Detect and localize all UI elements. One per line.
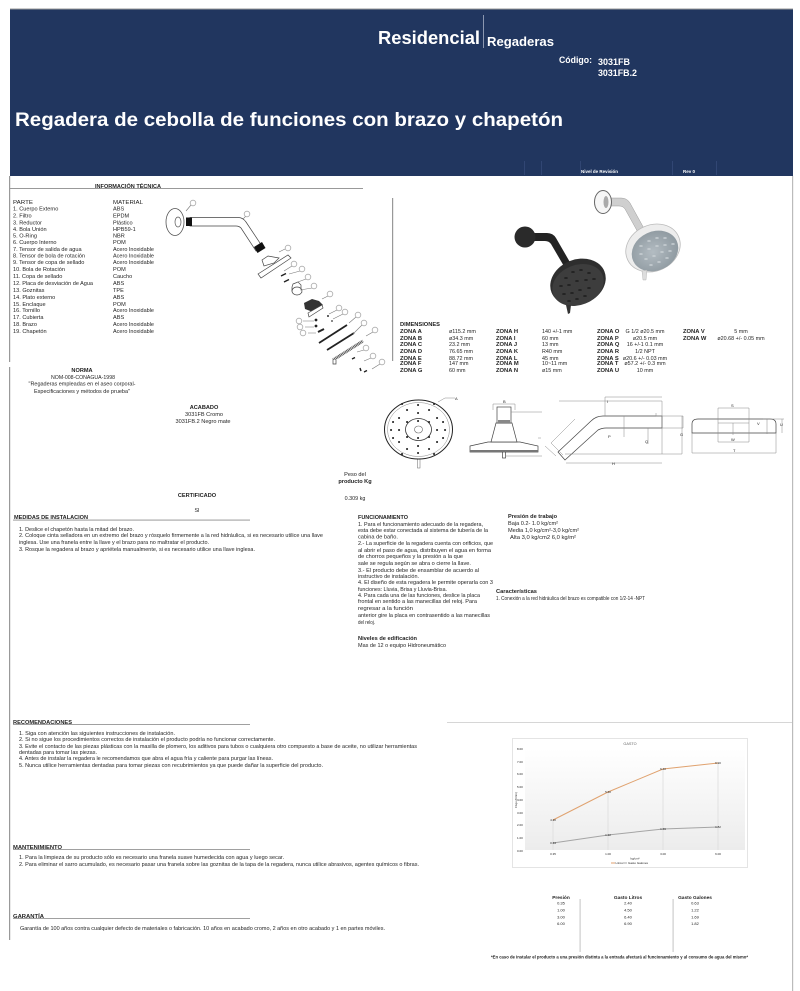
- dimensions: column V-W: 5 mm: [734, 329, 748, 335]
- parts table: HPB59-1: [113, 227, 136, 233]
- parts table: MATERIAL: [113, 200, 143, 206]
- dimensions: column A-G: ZONA D: [400, 349, 422, 355]
- table: liters column: 6.90: [624, 921, 633, 926]
- dimensions: column A-G: 147 mm: [449, 361, 469, 367]
- table: gallons column: [678, 895, 712, 926]
- section: operation: de chorros pequeños y la presión a la que: [358, 554, 463, 560]
- technical drawing: arm: I: [607, 399, 608, 404]
- section: installation: 2. Coloque cinta selladora en un extremo del brazo y rósquelo firmemente a la red hidráulica, si es necesario utilice una llave: [19, 533, 323, 539]
- parts table: 2. Filtro: [13, 214, 32, 220]
- dimensions: column V-W: [683, 329, 765, 342]
- technical drawing: flange side: [692, 403, 784, 453]
- finish block: 3031FB.2 Negro mate: [176, 419, 230, 425]
- chart: point labels: 1.82: [715, 825, 721, 829]
- parts table: ABS: [113, 315, 124, 321]
- dimensions: column V-W: ø20.68 +/- 0.05 mm: [717, 336, 765, 342]
- section: operation: regresar a la función: [358, 606, 413, 612]
- working pressure: Baja 0.2- 1.0 kg/cm²: [508, 521, 558, 527]
- finish block: ACABADO: [190, 405, 219, 411]
- section: warranty: GARANTÍA: [13, 912, 44, 920]
- chart: point labels: [550, 761, 721, 845]
- section: maintenance: MANTENIMIENTO: [13, 845, 63, 851]
- parts table: Acero Inoxidable: [113, 247, 154, 253]
- technical drawing: arm: G: [680, 432, 683, 437]
- dimensions: column O-U: ZONA U: [597, 368, 619, 374]
- parts table: EPDM: [113, 214, 130, 220]
- header: revision row: [524, 161, 717, 175]
- chart: point labels: 6.40: [660, 767, 666, 771]
- section: warranty: [13, 912, 385, 932]
- exploded: arm: [186, 218, 266, 253]
- finish block: [176, 405, 230, 425]
- technical drawing: round face: A: [455, 396, 458, 401]
- section: recommendations: 1. Siga con atención las siguientes instrucciones de instalación.: [19, 731, 175, 737]
- parts table: NBR: [113, 234, 125, 240]
- section: operation: 3.- El producto debe de ensamblar de acuerdo al: [358, 568, 479, 574]
- chart: title: GASTO: [623, 742, 637, 746]
- parts table: 4. Bola Unión: [13, 227, 47, 233]
- norm block: [28, 368, 136, 395]
- dimensions: column H-N: ZONA M: [496, 361, 519, 367]
- section: operation: 4. El diseño de esta regadera le permite operarla con 3: [358, 580, 493, 586]
- table: liters column: [614, 895, 642, 926]
- product weight: Peso del: [344, 472, 366, 478]
- chart: point labels: 6.90: [715, 761, 721, 765]
- dimensions: column O-U: ZONA R: [597, 349, 620, 355]
- certified block: CERTIFICADO: [178, 493, 217, 499]
- chart: legend: Litros: [616, 861, 623, 865]
- header: subcategory: Regaderas: [487, 35, 554, 49]
- section: operation: FUNCIONAMIENTO: [358, 515, 409, 521]
- section: installation: [13, 515, 323, 553]
- section: warranty: Garantía de 100 años contra cualquier defecto de materiales o fabricación. 10 años en acabado cromo, 2 años en otro acabado y 1 en partes móviles.: [20, 926, 385, 932]
- working pressure: Alta 3,0 kg/cm2 6,0 kg/m²: [510, 535, 576, 541]
- table: pressure column: [552, 895, 570, 926]
- dimensions: column H-N: ø15 mm: [542, 368, 562, 374]
- dimensions: column A-G: ZONA C: [400, 342, 423, 348]
- parts table: Acero Inoxidable: [113, 260, 154, 266]
- parts table: 18. Brazo: [13, 322, 37, 328]
- chart: axis labels: Flujo (l/min): [514, 792, 518, 808]
- chart: axis labels: [514, 747, 721, 860]
- parts table: POM: [113, 302, 126, 308]
- chart: orange series: [553, 763, 718, 820]
- section: operation: sale se regula según se abra o cierre la llave.: [358, 561, 471, 567]
- heading: información técnica: INFORMACIÓN TÉCNICA: [95, 182, 161, 190]
- dimensions: column H-N: ZONA J: [496, 342, 517, 348]
- section: operation: del reloj.: [358, 620, 375, 626]
- building levels: Mas de 12 o equipo Hidroneumático: [358, 643, 446, 649]
- flow table: [552, 895, 712, 952]
- technical drawing: round face: [384, 396, 458, 468]
- characteristics: 1. Conexión a la red hidráulica del brazo es compatible con 1/2-14 -NPT: [496, 596, 646, 602]
- table: pressure column: 1.00: [557, 908, 566, 912]
- parts table: 12. Placa de desviación de Agua: [13, 281, 94, 287]
- parts table: 14. Plato externo: [13, 295, 55, 301]
- technical drawing: flange side: S: [731, 403, 734, 408]
- header: revision row: Nivel de Revisión: [581, 169, 618, 174]
- certified block: [178, 493, 217, 514]
- product weight: 0.309 kg: [345, 496, 365, 502]
- dimensions: column H-N: 13 mm: [542, 342, 559, 348]
- dimensions: column A-G: ZONA A: [400, 329, 423, 335]
- section: recommendations: RECOMENDACIONES: [13, 720, 72, 726]
- chart: axis labels: 2.00: [517, 823, 523, 827]
- dimensions: column A-G: ø115.2 mm: [449, 329, 476, 335]
- chart: axis labels: 1.00: [517, 836, 523, 840]
- parts table: 9. Tensor de copa de sellado: [13, 260, 84, 266]
- technical drawing: flange side: T: [733, 448, 736, 453]
- table: liters column: 4.50: [624, 908, 633, 912]
- dimensions: column H-N: [496, 329, 573, 374]
- photo: matte black shower head: [514, 226, 613, 314]
- section: maintenance: 1. Para la limpieza de su producto sólo es necesario una franela suave humedecida con agua y luego secar.: [19, 855, 284, 861]
- parts table: 17. Cubierta: [13, 315, 44, 321]
- dimensions: column H-N: R40 mm: [542, 349, 563, 355]
- building levels: [358, 636, 446, 649]
- dimensions: column O-U: ø20.5 mm: [633, 336, 658, 342]
- section: operation: instructivo de instalación.: [358, 574, 419, 580]
- section: recommendations: 4. Antes de instalar la regadera le recomendamos que abra el agua fría y caliente para purgar las líneas.: [19, 756, 273, 762]
- photo: chrome shower head: [594, 190, 688, 281]
- chart: axis labels: 0.35: [550, 852, 556, 856]
- parts table: Plástico: [113, 220, 133, 226]
- section: installation: inglesa. Use una franela entre la llave y el brazo para no maltratar el producto.: [19, 540, 209, 546]
- norm block: Especificaciones y métodos de prueba": [34, 389, 130, 395]
- section: operation: [358, 515, 493, 649]
- parts table: Caucho: [113, 274, 132, 280]
- technical drawing: side view: B: [503, 399, 506, 404]
- section: operation: al abrir el paso de agua, distribuyen el agua en forma: [358, 548, 491, 554]
- parts table: [13, 200, 154, 335]
- finish block: 3031FB Cromo: [185, 412, 223, 418]
- technical drawing: flange side: W: [731, 437, 735, 442]
- parts table: Acero Inoxidable: [113, 329, 154, 335]
- header: codes: 3031FB: [598, 57, 630, 68]
- parts table: 8. Tensor de bola de rotación: [13, 254, 85, 260]
- chart: axis labels: 6.00: [715, 852, 721, 856]
- technical drawing: arm: P: [608, 434, 611, 439]
- dimensions: column A-G: ø34.3 mm: [449, 336, 474, 342]
- chart: axis labels: 8.00: [517, 747, 523, 751]
- section: installation: 1. Deslice el chapetón hasta la mitad del brazo.: [19, 527, 134, 533]
- parts table: 3. Reductor: [13, 220, 42, 226]
- chart: axis labels: 5.00: [517, 785, 523, 789]
- dimensions: column V-W: ZONA V: [683, 329, 705, 335]
- characteristics: Características: [496, 589, 537, 595]
- divider: vertical line: [392, 198, 393, 361]
- exploded: shower body: [258, 255, 291, 278]
- building levels: Niveles de edificación: [358, 636, 417, 642]
- norm block: NORMA: [71, 368, 93, 374]
- section: maintenance: [13, 845, 419, 868]
- parts table: 10. Bola de Rotación: [13, 267, 65, 273]
- dimensions: column V-W: ZONA W: [683, 336, 707, 342]
- header: code label: Código:: [559, 55, 592, 65]
- table: gallons column: 1.22: [691, 908, 700, 912]
- parts table: ABS: [113, 206, 124, 212]
- dimensions: column O-U: ZONA Q: [597, 342, 620, 348]
- working pressure: [508, 514, 579, 541]
- footnote: *En caso de instalar el producto a una presión distinta a la entrada afectará al funcionamiento y al consumo de agua del mismo*: [491, 954, 748, 960]
- dimensions: column A-G: ZONA F: [400, 361, 422, 367]
- chart: legend: [611, 861, 649, 865]
- parts table: 13. Goznitas: [13, 288, 45, 294]
- table: liters column: Gasto Litros: [614, 895, 642, 901]
- chart: point labels: 1.22: [605, 833, 611, 837]
- section: recommendations: 2. Si no sigue los procedimientos correctos de instalación el producto podría no funcionar correctamente.: [19, 737, 275, 743]
- technical drawing: arm: [545, 397, 683, 466]
- technical drawing: arm: Q: [645, 439, 648, 444]
- table: gallons column: Gasto Galones: [678, 895, 712, 901]
- dimensions: column A-G: 76.65 mm: [449, 349, 473, 355]
- section: installation: 3. Rosque la regadera al brazo y apriétela manualmente, si es necesario utilice una llave inglesa.: [19, 547, 255, 553]
- dimensions: column H-N: 10~11 mm: [542, 361, 568, 367]
- table: pressure column: Presión: [552, 895, 570, 901]
- header: codes: [598, 57, 637, 79]
- table: pressure column: 6.00: [557, 921, 566, 926]
- dimensions: column A-G: ZONA G: [400, 368, 423, 374]
- dimensions: column O-U: [597, 329, 668, 374]
- parts table: 11. Copa de sellado: [13, 274, 62, 280]
- section: operation: cabina de baño.: [358, 534, 398, 540]
- table: pressure column: 3.00: [557, 914, 566, 920]
- dimensions: column O-U: ZONA O: [597, 329, 620, 335]
- dimensions: column A-G: [400, 329, 476, 374]
- chart: gray series: [553, 827, 718, 843]
- chart: plot area: [525, 748, 745, 850]
- dimensions: column H-N: 140 +/-1 mm: [542, 329, 573, 335]
- technical drawing: arm: H: [612, 461, 615, 466]
- section: operation: 4. Para cada una de las funciones, deslice la placa: [358, 593, 480, 599]
- exploded: flange: [166, 208, 184, 236]
- chart: axis labels: 3.00: [517, 811, 523, 815]
- parts table: 6. Cuerpo Interno: [13, 240, 57, 246]
- section: operation: 2.- La superficie de la regadera cuenta con orificios, que: [358, 541, 493, 547]
- section: operation: funciones: Lluvia, Brisa y Lluvia-Brisa.: [358, 587, 447, 593]
- table: pressure column: 0.35: [557, 900, 566, 906]
- section: installation: MEDIDAS DE INSTALACION: [14, 515, 88, 521]
- chart: axis labels: 4.00: [517, 798, 523, 802]
- characteristics: [496, 589, 646, 602]
- parts table: Acero Inoxidable: [113, 322, 154, 328]
- chart: axis labels: 1.00: [605, 852, 611, 856]
- parts table: PARTE: [13, 200, 33, 206]
- parts table: 15. Enclaque: [13, 302, 46, 308]
- parts table: 1. Cuerpo Externo: [13, 206, 58, 212]
- section: operation: esta debe estar conectada al sistema de tubería de la: [358, 528, 488, 534]
- product weight: producto Kg: [338, 479, 372, 485]
- dimensions table: DIMENSIONES: [400, 322, 440, 328]
- parts table: 7. Tensor de salida de agua: [13, 247, 83, 253]
- chart: point labels: 4.20: [550, 818, 556, 822]
- dimensions: column H-N: ZONA L: [496, 356, 518, 362]
- technical drawing: flange side: V: [757, 421, 760, 426]
- parts table: POM: [113, 240, 126, 246]
- exploded: small parts: [281, 274, 367, 372]
- parts table: 16. Tornillo: [13, 308, 40, 314]
- header: codes: 3031FB.2: [598, 68, 637, 79]
- dimensions: column A-G: 88.72 mm: [449, 356, 473, 362]
- dimensions: column O-U: ZONA S: [597, 356, 619, 362]
- exploded: leaders: [186, 205, 380, 369]
- dimensions: column O-U: ZONA T: [597, 361, 619, 367]
- chart: point labels: 1.69: [660, 827, 666, 831]
- exploded parts diagram: [166, 200, 385, 372]
- dimensions: column H-N: 60 mm: [542, 336, 559, 342]
- chart: point labels: 5.60: [605, 790, 611, 794]
- table: gallons column: 0.63: [691, 900, 700, 906]
- dimensions: column O-U: 16 +/-1 0.1 mm: [627, 342, 664, 348]
- parts table: Acero Inoxidable: [113, 308, 154, 314]
- technical drawing: side view: [470, 399, 542, 458]
- title: Regadera de cebolla de funciones con brazo y chapetón: [15, 109, 563, 131]
- working pressure: Media 1,0 kg/cm²-3,0 kg/cm²: [508, 528, 579, 534]
- chart: axis labels: 6.00: [517, 772, 523, 776]
- parts table: Acero Inoxidable: [113, 254, 154, 260]
- table: gallons column: 1.69: [691, 914, 700, 920]
- dimensions: column O-U: G 1/2 ø20.5 mm: [626, 329, 665, 335]
- section: recommendations: 3. Evite el contacto de las piezas plásticas con la masilla de plomero, los aditivos para tubos o cualquiera otro compuesto a base de aceite, no utilizar herramientas: [19, 744, 417, 750]
- dimensions: column H-N: ZONA H: [496, 329, 518, 335]
- certified block: SI: [194, 508, 200, 514]
- technical drawing: flange side: U: [780, 422, 783, 427]
- table: gallons column: 1.82: [691, 921, 700, 926]
- parts table: TPE: [113, 288, 124, 294]
- dimensions: column A-G: ZONA B: [400, 336, 422, 342]
- norm block: NOM-008-CONAGUA-1998: [51, 375, 115, 381]
- header: category: Residencial: [378, 28, 480, 48]
- header banner: [10, 8, 793, 176]
- chart: axis labels: kg/cm²: [630, 856, 640, 860]
- section: operation: anterior gire la placa en contrasentido a las manecillas: [358, 613, 490, 619]
- section: recommendations: [13, 720, 792, 769]
- dimensions: column A-G: 60 mm: [449, 368, 466, 374]
- chart: axis labels: 7.00: [517, 760, 523, 764]
- exploded: balloons: [190, 200, 385, 365]
- line chart: gasto: [512, 738, 748, 868]
- dimensions: column O-U: ø57.2 +/- 0.3 mm: [624, 361, 666, 367]
- chart: legend: Gasto Galones: [628, 861, 649, 865]
- dimensions: column H-N: ZONA K: [496, 349, 519, 355]
- section: operation: frontal en sentido a las manecillas del reloj. Para: [358, 599, 477, 605]
- dimensions: column O-U: 1/2 NPT: [635, 349, 656, 355]
- dimensions: column H-N: ZONA N: [496, 368, 518, 374]
- chart: drop lines: [553, 763, 718, 850]
- table: liters column: 2.40: [624, 900, 633, 906]
- section: recommendations: 5. Nunca utilice herramientas dentadas para tomar piezas con recubrimientos ya que puede dañar la superficie del producto.: [19, 763, 323, 769]
- section: recommendations: dentadas para tomar las piezas.: [19, 750, 97, 756]
- dimensions: column H-N: 45 mm: [542, 356, 559, 362]
- dimensions: column A-G: 23.2 mm: [449, 342, 470, 348]
- working pressure: Presión de trabajo: [508, 514, 558, 520]
- parts table: ABS: [113, 295, 124, 301]
- section: operation: 1. Para el funcionamiento adecuado de la regadera,: [358, 522, 483, 528]
- parts table: 5. O-Ring: [13, 234, 37, 240]
- norm block: "Regaderas empleadas en el aseo corporal-: [28, 382, 136, 388]
- dimensions: column H-N: ZONA I: [496, 336, 516, 342]
- header: revision row: Rev 0: [683, 169, 695, 174]
- product weight: [338, 472, 372, 502]
- dimensions: column O-U: ø20.6 +/- 0.03 mm: [623, 356, 668, 362]
- parts table: POM: [113, 267, 126, 273]
- dimensions table: [400, 322, 765, 374]
- parts table: ABS: [113, 281, 124, 287]
- section: maintenance: 2. Para eliminar el sarro acumulado, es necesario pasar una franela sobre las goznitas de la tapa de la regadera, nunca utilice abrasivos, agentes químicos o fibras.: [19, 862, 419, 868]
- chart: axis labels: 3.00: [660, 852, 666, 856]
- chart: axis labels: 0.00: [517, 849, 523, 853]
- parts table: 19. Chapetón: [13, 329, 47, 335]
- dimensions: column A-G: ZONA E: [400, 356, 422, 362]
- dimensions: column O-U: ZONA P: [597, 336, 619, 342]
- chart: point labels: 0.63: [550, 841, 556, 845]
- table: liters column: 6.40: [624, 914, 633, 920]
- dimensions: column O-U: 10 mm: [637, 368, 654, 374]
